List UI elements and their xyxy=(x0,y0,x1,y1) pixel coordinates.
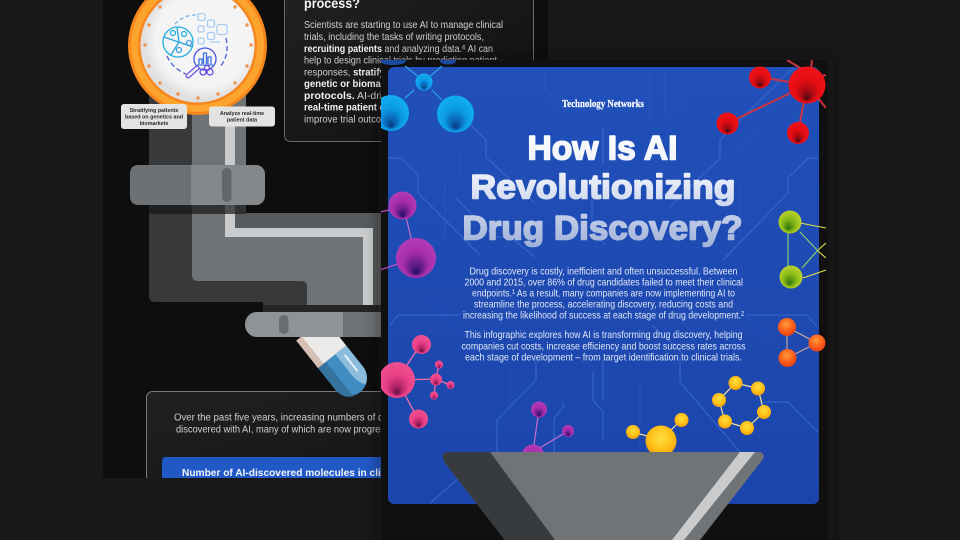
panel body text: responses, stratifying xyxy=(304,68,399,78)
card shadow xyxy=(378,58,834,540)
label: analyze real-time: patient data xyxy=(227,118,258,124)
intro paragraph: Drug discovery is costly, inefficient and often unsuccessful. Between xyxy=(470,266,738,278)
panel body text: Scientists are starting to use AI to manage clinical xyxy=(304,20,503,31)
panel body text: improve trial outcomes xyxy=(304,114,399,126)
panel: AI-discovered molecules xyxy=(146,391,381,478)
molecule: blue xyxy=(381,60,474,132)
funnel xyxy=(443,452,764,540)
capsule pill xyxy=(296,337,367,397)
title: Drug Discovery? xyxy=(462,209,742,247)
molecule: purple xyxy=(380,192,436,278)
icon: patient stratification xyxy=(163,14,227,76)
title: Revolutionizing xyxy=(470,168,736,206)
molecule: green xyxy=(778,210,826,288)
title xyxy=(462,129,742,247)
front card xyxy=(388,67,819,504)
panel intro text: Over the past five years, increasing numbers of drugs xyxy=(174,412,402,424)
circuit background xyxy=(388,67,818,503)
explainer paragraph: This infographic explores how AI is transforming drug discovery, helping xyxy=(464,329,743,341)
molecule: yellow xyxy=(626,413,688,452)
brand logo text: Technology Networks xyxy=(562,99,644,110)
explainer paragraph: companies cut costs, increase efficiency and boost success rates across xyxy=(462,340,746,352)
panel intro text: discovered with AI, many of which are now progressing xyxy=(176,424,402,436)
explainer paragraph: each stage of development – from target identification to clinical trials. xyxy=(465,352,742,364)
intro paragraph xyxy=(463,266,744,322)
label: stratifying patients: based on genetics and xyxy=(125,114,183,120)
label: analyze real-time xyxy=(209,106,275,126)
label: stratifying patients: biomarkets xyxy=(140,121,168,127)
molecule: lower purple xyxy=(522,402,574,452)
panel body text xyxy=(304,20,503,126)
panel intro text xyxy=(174,413,381,434)
lower pipe clamp xyxy=(245,312,385,337)
chart header bar xyxy=(162,457,381,478)
molecule: red xyxy=(716,60,826,144)
label: analyze real-time: Analyze real-time xyxy=(220,111,264,117)
intro paragraph: streamline the process, accelerating discovery, reducing costs and xyxy=(474,298,733,310)
label: stratifying patients xyxy=(121,104,187,129)
chart header bar: Number of AI-discovered molecules in clinical xyxy=(182,467,404,479)
label: stratifying patients: Stratifying patients xyxy=(130,108,178,114)
panel body text: help to design clinical trials by predicting patient xyxy=(304,56,497,66)
molecule: orange xyxy=(778,318,826,367)
back infographic page xyxy=(103,0,548,512)
panel: clinical trials text xyxy=(284,0,534,142)
intro paragraph: endpoints.¹ As a result, many companies are now implementing AI to xyxy=(472,288,735,300)
panel body text: protocols. AI-driven xyxy=(304,91,399,102)
molecule: pink xyxy=(379,335,454,428)
intro paragraph: 2000 and 2015, over 86% of drug candidates failed to meet their clinical xyxy=(464,276,743,288)
molecule: yellow hexagon xyxy=(712,376,771,435)
panel body text: trials, including the tasks of writing protocols, xyxy=(304,32,484,43)
panel body text: genetic or biomarker xyxy=(304,79,399,90)
pipe xyxy=(149,95,383,312)
explainer paragraph xyxy=(462,329,746,364)
upper pipe clamp xyxy=(130,165,265,205)
magnifier dial xyxy=(128,0,267,115)
panel body text: recruiting patients and analyzing data.⁶ AI can xyxy=(304,44,493,55)
front page backing xyxy=(381,60,827,540)
panel body text: real-time patient data xyxy=(304,102,399,114)
intro paragraph: increasing the likelihood of success at each stage of drug development.² xyxy=(463,310,744,322)
title: How Is AI xyxy=(528,129,678,167)
